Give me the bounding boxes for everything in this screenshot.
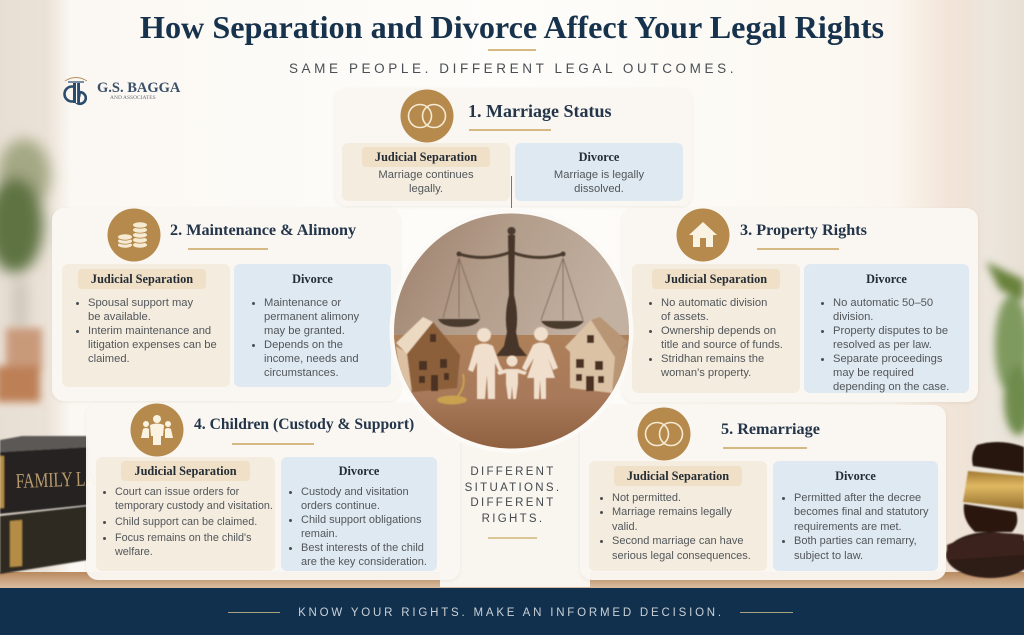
judicial separation column (342, 143, 510, 201)
column text: permanent alimony (264, 311, 359, 323)
column text: Maintenance or (264, 297, 341, 309)
column text: orders continue. (301, 500, 380, 512)
left plant (0, 139, 50, 330)
column text: No automatic 50–50 (833, 297, 933, 309)
column text: valid. (612, 521, 638, 533)
column text: Depends on the (264, 339, 343, 351)
footer rule right (740, 612, 793, 613)
heading: 2. Maintenance & Alimony (170, 221, 356, 239)
column heading: Divorce (579, 150, 619, 164)
heading rule (188, 248, 268, 250)
icon: wedding rings (638, 408, 690, 460)
column text (554, 169, 644, 195)
column text: Separate proceedings (833, 353, 942, 365)
center tagline (465, 466, 561, 525)
column text: Interim maintenance and (88, 325, 211, 337)
column heading: Divorce (866, 272, 907, 286)
column text: Focus remains on the child's (115, 532, 252, 544)
title: How Separation and Divorce Affect Your Legal Rights (140, 9, 884, 45)
heading rule (723, 447, 807, 448)
column heading: Judicial Separation (627, 469, 729, 483)
column heading: Judicial Separation (134, 464, 237, 478)
footer rule left (228, 612, 280, 613)
column text: becomes final and statutory (794, 506, 929, 518)
title underline (488, 49, 536, 50)
heading rule (232, 443, 314, 444)
column text (782, 492, 929, 562)
column text: Child support can be claimed. (115, 516, 257, 528)
column text: title and source of funds. (661, 339, 783, 351)
column text (252, 297, 359, 379)
column text: Second marriage can have (612, 535, 743, 547)
column text: Court can issue orders for (115, 486, 239, 498)
column text: Marriage remains legally (612, 506, 732, 518)
divorce column (515, 143, 683, 201)
column text (289, 486, 427, 568)
panel: center backing (440, 400, 590, 587)
column text: division. (833, 311, 873, 323)
column text (600, 492, 751, 562)
heading: 3. Property Rights (740, 221, 867, 239)
column text: are the key consideration. (301, 556, 427, 568)
column text: depending on the case. (833, 381, 949, 393)
column text: income, needs and (264, 353, 359, 365)
column text: dissolved. (574, 183, 624, 195)
divorce column (773, 461, 938, 571)
left house (396, 346, 412, 392)
tagline rule (488, 537, 537, 538)
column heading: Judicial Separation (91, 272, 193, 286)
column heading: Divorce (339, 464, 379, 478)
panel: 2. Maintenance & Alimony (52, 208, 400, 401)
blurred background photo: FAMILY LAW (15, 467, 111, 493)
judicial separation column (632, 264, 800, 393)
column text (76, 297, 217, 365)
footer text: KNOW YOUR RIGHTS. MAKE AN INFORMED DECISION. (298, 607, 724, 619)
column text: Both parties can remarry, (794, 535, 917, 547)
beam (459, 252, 563, 258)
right house (612, 344, 628, 393)
table (0, 572, 1024, 588)
column text: may be granted. (264, 325, 345, 337)
column text: may be required (833, 367, 914, 379)
column text: resolved as per law. (833, 339, 932, 351)
column text: woman's property. (661, 367, 751, 379)
column text: Permitted after the decree (794, 492, 921, 504)
column text: Best interests of the child (301, 542, 424, 554)
column text: litigation expenses can be (88, 339, 217, 351)
column text: subject to law. (794, 550, 863, 562)
column text: serious legal consequences. (612, 550, 751, 562)
center illustration: scales, family and houses (390, 214, 634, 448)
strings (443, 258, 583, 320)
panel: 1. Marriage Status (335, 88, 692, 206)
column text: temporary custody and visitation. (115, 500, 273, 512)
heading: 1. Marriage Status (468, 100, 611, 120)
column text (821, 297, 949, 393)
panel: 5. Remarriage (580, 405, 946, 580)
column text: of assets. (661, 311, 709, 323)
center tagline: DIFFERENT (470, 497, 556, 509)
logo: G.S. Bagga and Associates (63, 77, 180, 106)
judicial separation column (96, 457, 275, 571)
column text: be available. (88, 311, 151, 323)
column heading: Judicial Separation (375, 150, 477, 164)
heading rule (757, 248, 839, 250)
column text: Child support obligations (301, 514, 421, 526)
gavel (946, 442, 1024, 578)
connector line from panel 1 (511, 176, 512, 208)
column text: claimed. (88, 353, 130, 365)
column text: Stridhan remains the (661, 353, 764, 365)
column (496, 235, 527, 356)
panel: 4. Children (Custody & Support) (86, 403, 460, 580)
column text: Custody and visitation (301, 486, 409, 498)
column text: Ownership depends on (661, 325, 776, 337)
column text: remain. (301, 528, 338, 540)
column text: circumstances. (264, 367, 339, 379)
column text: Marriage is legally (554, 169, 644, 181)
icon: coin stacks (108, 208, 160, 262)
column text (649, 297, 783, 379)
heading rule (469, 129, 551, 130)
icon: wedding rings (400, 90, 454, 142)
family cut-outs (468, 327, 558, 399)
panel: 3. Property Rights (622, 208, 978, 402)
logo mark (63, 77, 88, 106)
divorce column (234, 264, 391, 387)
judicial separation column (62, 264, 230, 387)
column text: legally. (409, 183, 443, 195)
divorce column (281, 457, 437, 571)
footer bar (0, 588, 1024, 635)
column text: requirements are met. (794, 521, 902, 533)
column text: Property disputes to be (833, 325, 948, 337)
column heading: Divorce (292, 272, 333, 286)
center tagline: RIGHTS. (482, 513, 544, 525)
logo name: G.S. BAGGA (97, 80, 180, 96)
logo tagline: AND ASSOCIATES (110, 95, 156, 101)
center tagline: DIFFERENT (470, 466, 556, 478)
column heading: Judicial Separation (665, 272, 767, 286)
column text: No automatic division (661, 297, 767, 309)
column text (378, 169, 474, 195)
divorce column (804, 264, 969, 393)
icon: family group (130, 404, 184, 456)
icon: house (676, 208, 730, 262)
column text: Marriage continues (378, 169, 474, 181)
right plant (986, 262, 1024, 435)
subtitle: SAME PEOPLE. DIFFERENT LEGAL OUTCOMES. (289, 61, 737, 76)
heading: 4. Children (Custody & Support) (194, 416, 414, 433)
heading: 5. Remarriage (721, 420, 820, 438)
pans (438, 319, 480, 327)
column text (103, 486, 273, 558)
center tagline: SITUATIONS. (465, 482, 561, 494)
column text: Spousal support may (88, 297, 193, 309)
column heading: Divorce (835, 469, 876, 483)
column text: welfare. (115, 546, 153, 558)
column text: Not permitted. (612, 492, 681, 504)
rings (437, 396, 467, 404)
books (0, 436, 88, 574)
judicial separation column (589, 461, 767, 571)
